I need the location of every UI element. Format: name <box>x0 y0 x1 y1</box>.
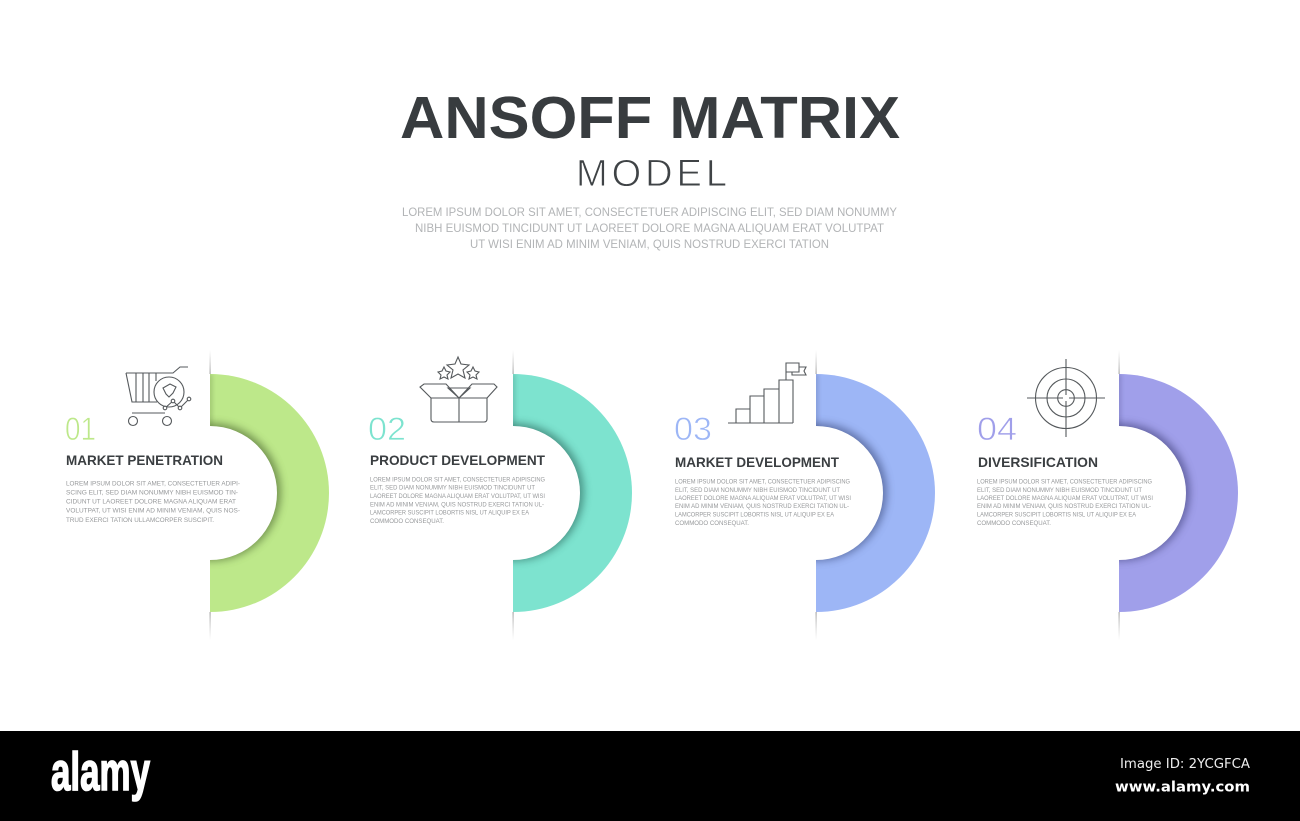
body text: LOREM IPSUM DOLOR SIT AMET, CONSECTETUER ADIPISCING <box>370 476 545 484</box>
icon: target <box>1027 359 1105 437</box>
body text: LAOREET DOLORE MAGNA ALIQUAM ERAT VOLUTPAT, UT WISI <box>675 495 851 502</box>
body text: ENIM AD MINIM VENIAM, QUIS NOSTRUD EXERCI TATION UL- <box>675 503 849 510</box>
body text: TRUD EXERCI TATION ULLAMCORPER SUSCIPIT. <box>66 517 214 524</box>
body text <box>66 480 240 524</box>
body text: LAMCORPER SUSCIPIT LOBORTIS NISL UT ALIQUIP EX EA <box>977 512 1137 518</box>
body text: SCING ELIT, SED DIAM NONUMMY NIBH EUISMOD TIN- <box>66 490 238 496</box>
heading: PRODUCT DEVELOPMENT <box>370 452 545 468</box>
body text: ELIT, SED DIAM NONUMMY NIBH EUISMOD TINCIDUNT UT <box>977 487 1142 494</box>
body text: LAMCORPER SUSCIPIT LOBORTIS NISL UT ALIQUIP EX EA <box>370 510 530 516</box>
body text: LOREM IPSUM DOLOR SIT AMET, CONSECTETUER ADIPISCING <box>977 478 1152 486</box>
body text <box>370 476 545 525</box>
footer bar <box>0 731 1300 821</box>
heading: MARKET DEVELOPMENT <box>675 454 839 470</box>
number 03: 03 <box>674 411 712 447</box>
heading: DIVERSIFICATION <box>978 454 1098 470</box>
half ring: purple <box>1118 353 1238 636</box>
panel: product development <box>368 350 632 640</box>
panel: diversification <box>977 350 1238 640</box>
body text: ELIT, SED DIAM NONUMMY NIBH EUISMOD TINCIDUNT UT <box>675 487 840 494</box>
number 04: 04 <box>977 411 1017 447</box>
body text: ELIT, SED DIAM NONUMMY NIBH EUISMOD TINCIDUNT UT <box>370 484 535 492</box>
body text: LAOREET DOLORE MAGNA ALIQUAM ERAT VOLUTPAT, UT WISI <box>977 495 1153 502</box>
body text: LAOREET DOLORE MAGNA ALIQUAM ERAT VOLUTPAT, UT WISI <box>370 493 545 500</box>
panel: market development <box>674 350 935 640</box>
image id: Image ID: 2YCGFCA <box>1120 756 1251 772</box>
body text: LOREM IPSUM DOLOR SIT AMET, CONSECTETUER ADIPI- <box>66 480 240 488</box>
body text: ENIM AD MINIM VENIAM, QUIS NOSTRUD EXERCI TATION UL- <box>370 502 544 508</box>
body text: COMMODO CONSEQUAT. <box>977 520 1051 527</box>
half ring: green <box>210 353 329 636</box>
body text <box>675 478 851 527</box>
body text: LOREM IPSUM DOLOR SIT AMET, CONSECTETUER ADIPISCING <box>675 478 850 486</box>
body text: LAMCORPER SUSCIPIT LOBORTIS NISL UT ALIQUIP EX EA <box>675 512 835 518</box>
icon: open box with stars <box>420 357 497 422</box>
body text: ENIM AD MINIM VENIAM, QUIS NOSTRUD EXERCI TATION UL- <box>977 503 1151 510</box>
title: ANSOFF MATRIX <box>400 85 900 151</box>
half ring: blue <box>816 353 935 636</box>
panel: market penetration <box>65 350 329 640</box>
intro text: NIBH EUISMOD TINCIDUNT UT LAOREET DOLORE MAGNA ALIQUAM ERAT VOLUTPAT <box>415 221 885 235</box>
footer logo: alamy <box>51 742 150 802</box>
number 01: 01 <box>65 411 96 447</box>
subtitle: MODEL <box>576 153 727 195</box>
body text <box>977 478 1153 527</box>
heading: MARKET PENETRATION <box>66 452 223 468</box>
icon: bar steps with flag <box>728 363 806 423</box>
number 02: 02 <box>368 411 406 447</box>
intro text: LOREM IPSUM DOLOR SIT AMET, CONSECTETUER ADIPISCING ELIT, SED DIAM NONUMMY <box>402 205 897 219</box>
half ring: teal <box>512 353 632 636</box>
body text: COMMODO CONSEQUAT. <box>370 518 444 525</box>
body text: CIDUNT UT LAOREET DOLORE MAGNA ALIQUAM ERAT <box>66 498 236 506</box>
intro text: UT WISI ENIM AD MINIM VENIAM, QUIS NOSTRUD EXERCI TATION <box>470 237 829 251</box>
body text: COMMODO CONSEQUAT. <box>675 520 749 527</box>
icon: shopping cart with globe <box>126 367 191 426</box>
body text: VOLUTPAT, UT WISI ENIM AD MINIM VENIAM, QUIS NOS- <box>66 508 240 514</box>
website: www.alamy.com <box>1115 780 1250 796</box>
intro text <box>402 205 897 251</box>
